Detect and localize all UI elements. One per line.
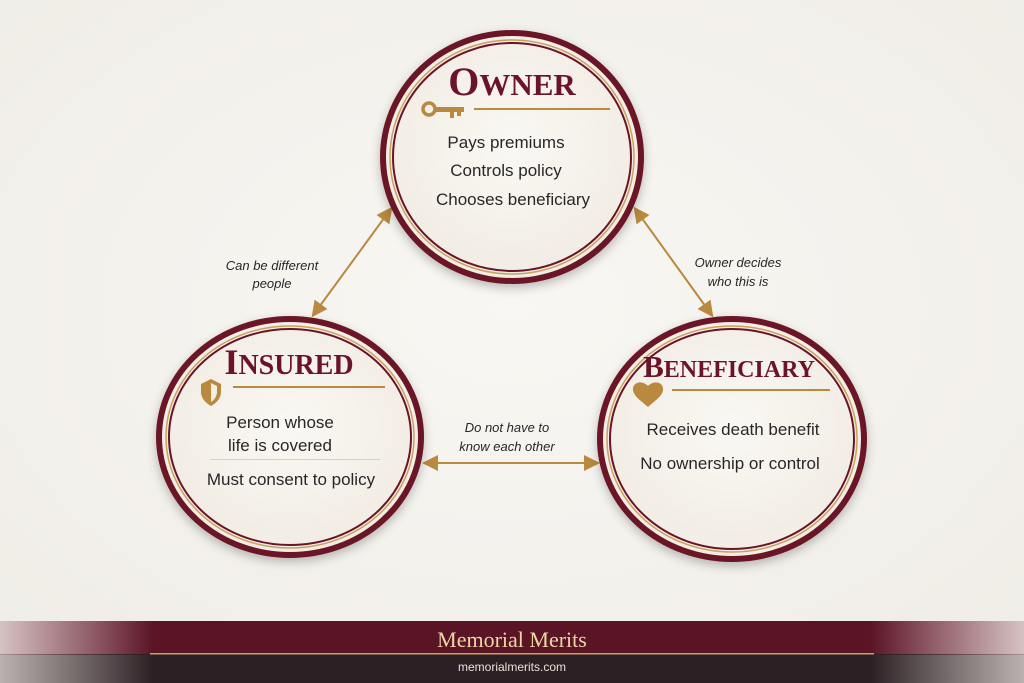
- arrow: insured to beneficiary: [426, 462, 596, 464]
- label: can be different people: Can be different: [226, 258, 320, 273]
- text: insured details: Person whose: [226, 413, 334, 432]
- label: owner decides: who this is: [708, 274, 769, 289]
- heading: beneficiary: BENEFICIARY: [643, 349, 815, 384]
- arrow: owner to beneficiary: [636, 210, 711, 314]
- text: owner roles: Chooses beneficiary: [436, 190, 591, 209]
- footer url: memorialmerits.com: [458, 660, 566, 674]
- heading: owner: OWNER: [448, 59, 576, 104]
- footer title: Memorial Merits: [437, 627, 587, 652]
- arrow: owner to insured: [314, 210, 390, 314]
- text: owner roles: Controls policy: [450, 161, 562, 180]
- text: owner roles: [436, 133, 591, 209]
- text: insured details: life is covered: [228, 436, 332, 455]
- text: insured details: Must consent to policy: [207, 470, 376, 489]
- text: owner roles: Pays premiums: [447, 133, 565, 152]
- footer band: [0, 621, 1024, 683]
- text: beneficiary details: [640, 420, 820, 473]
- panel: beneficiary: [600, 319, 864, 559]
- label: do not have to know: know each other: [459, 439, 555, 454]
- panel: insured: [159, 319, 421, 555]
- icon: key: [423, 103, 464, 118]
- text: beneficiary details: No ownership or control: [640, 454, 820, 473]
- icon: heart: [633, 382, 663, 407]
- text: beneficiary details: Receives death benefit: [647, 420, 820, 439]
- text: insured details: [207, 413, 380, 489]
- label: do not have to know: Do not have to: [465, 420, 549, 435]
- label: owner decides: Owner decides: [695, 255, 782, 270]
- icon: shield: [201, 379, 221, 406]
- label: can be different people: people: [251, 276, 292, 291]
- heading: insured: INSURED: [224, 342, 354, 382]
- panel: owner: [383, 33, 641, 281]
